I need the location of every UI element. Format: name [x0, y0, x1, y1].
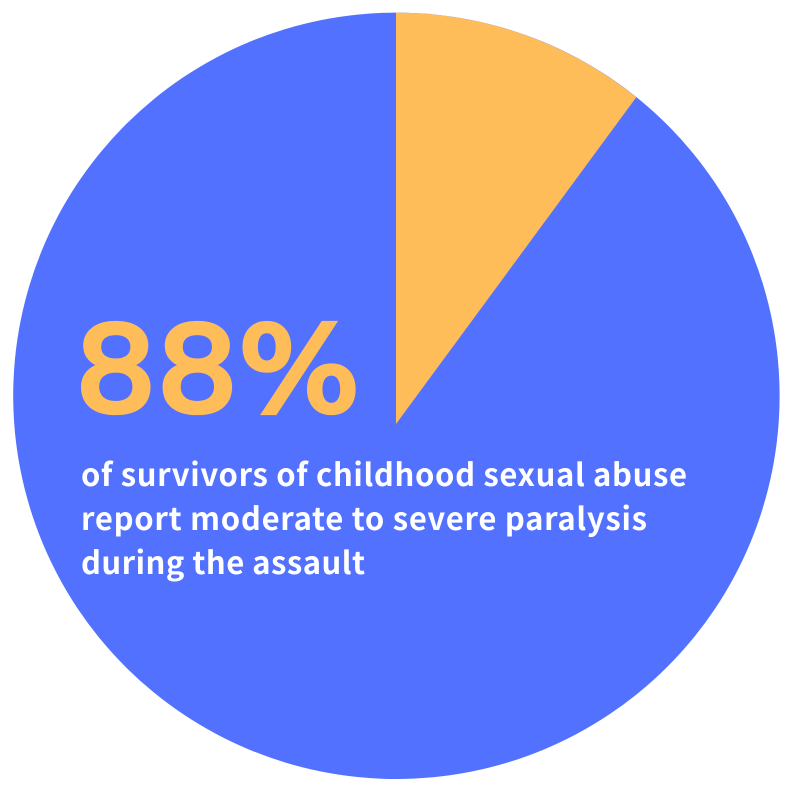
line 3: during the assault — [81, 538, 365, 583]
line 1: of survivors of childhood sexual abuse — [81, 450, 687, 495]
pie segment: 12% orange wedge — [396, 13, 636, 424]
description text — [81, 450, 687, 583]
line 2: report moderate to severe paralysis — [81, 494, 647, 539]
statistic: 88%: 88% — [75, 301, 360, 439]
